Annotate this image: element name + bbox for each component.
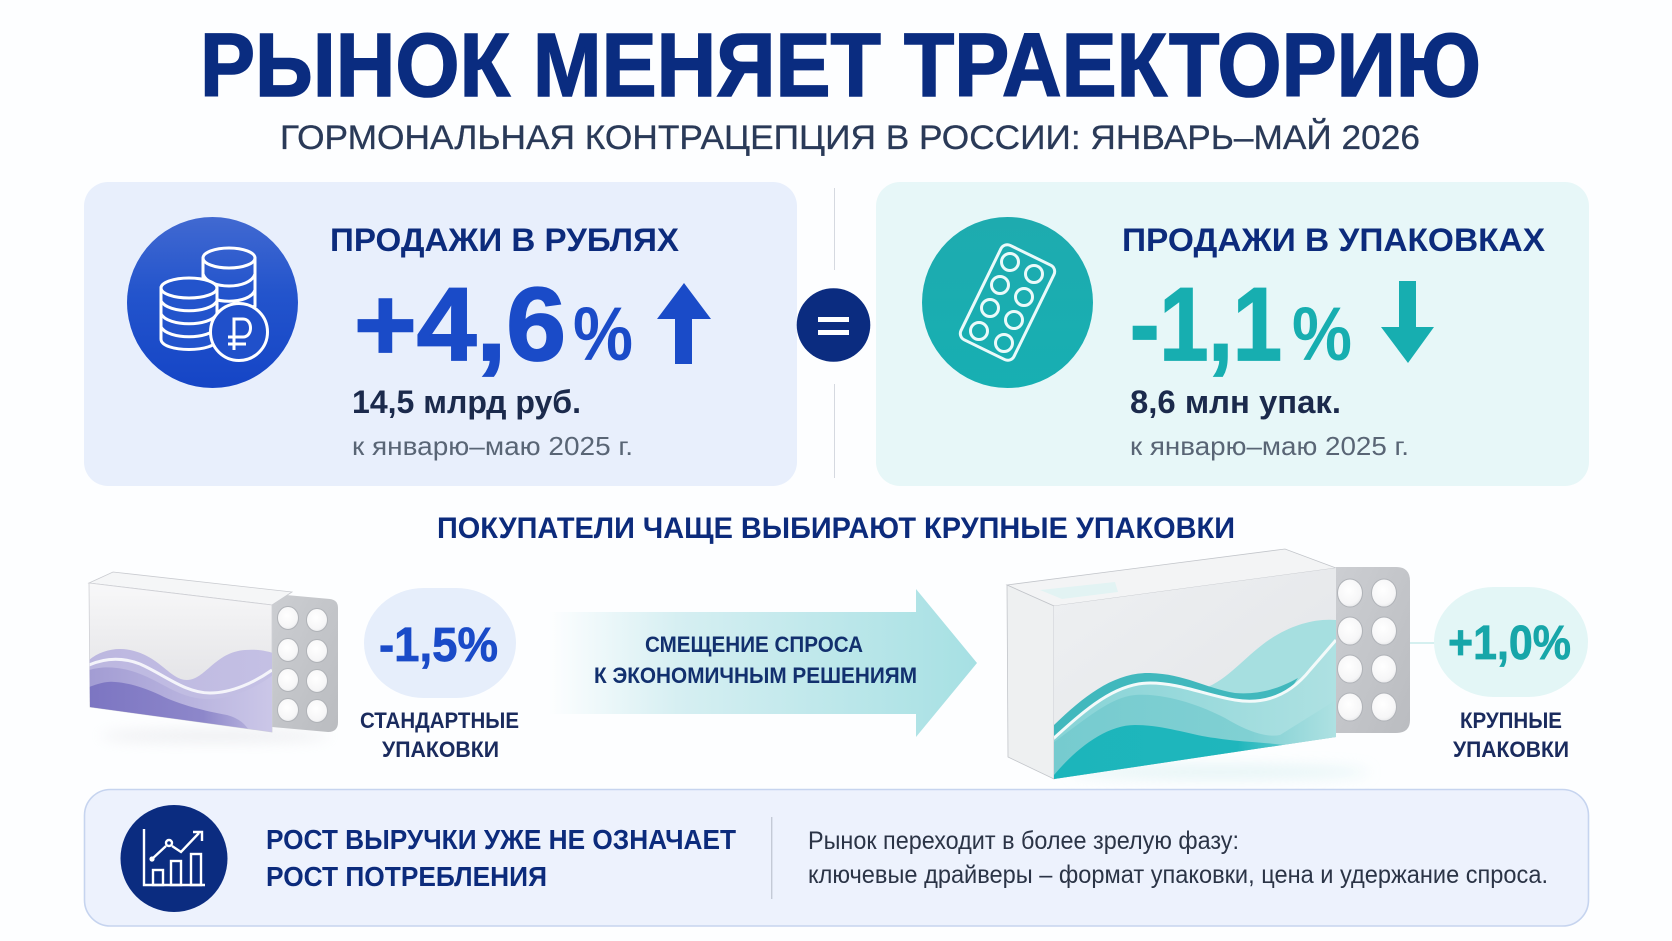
comparison note: к январю–маю 2025 г.: [352, 431, 633, 461]
key message: РОСТ ПОТРЕБЛЕНИЯ: [266, 861, 547, 892]
callout: standard packs change: [364, 588, 516, 698]
label: large packs: УПАКОВКИ: [1453, 737, 1569, 762]
amount: 8,6 млн упак.: [1130, 384, 1341, 420]
label: standard packs: УПАКОВКИ: [382, 737, 499, 762]
explanation: Рынок переходит в более зрелую фазу:: [808, 827, 1239, 855]
amount: 14,5 млрд руб.: [352, 384, 581, 420]
illustration: large pack: [1007, 549, 1410, 780]
panel: conclusion: [84, 790, 1588, 926]
arrow: down: [1381, 281, 1434, 363]
panel: sales in rubles: [84, 182, 797, 486]
subtitle: ГОРМОНАЛЬНАЯ КОНТРАЦЕПЦИЯ В РОССИИ: ЯНВАРЬ–МАЙ 2026: [280, 119, 1420, 157]
value: +4,6: [354, 267, 566, 383]
explanation: ключевые драйверы – формат упаковки, цена и удержание спроса.: [808, 861, 1548, 889]
callout: standard packs change: -1,5%: [379, 619, 498, 672]
callout: large packs change: +1,0%: [1448, 617, 1571, 670]
label: large packs: [1453, 708, 1569, 762]
label: standard packs: [360, 708, 519, 762]
arrow: demand shift: [549, 589, 977, 737]
callout: large packs change: [1434, 587, 1588, 697]
divider top: [834, 188, 835, 270]
connector: [1410, 642, 1440, 644]
comparison note: к январю–маю 2025 г.: [1130, 431, 1409, 461]
icon: blister: [922, 217, 1093, 388]
arrow: demand shift: К ЭКОНОМИЧНЫМ РЕШЕНИЯМ: [594, 663, 917, 688]
panel: sales in packs: [876, 182, 1589, 486]
arrow: up: [657, 283, 711, 364]
key message: РОСТ ВЫРУЧКИ УЖЕ НЕ ОЗНАЧАЕТ: [266, 824, 736, 855]
key message: [266, 824, 736, 892]
illustration: standard pack: [89, 572, 338, 742]
title: РЫНОК МЕНЯЕТ ТРАЕКТОРИЮ: [200, 16, 1481, 116]
label: standard packs: СТАНДАРТНЫЕ: [360, 708, 519, 733]
explanation: [808, 827, 1548, 889]
percent sign: %: [1292, 292, 1352, 377]
label: large packs: КРУПНЫЕ: [1460, 708, 1562, 733]
heading: ПРОДАЖИ В РУБЛЯХ: [330, 222, 680, 258]
divider bottom: [834, 384, 835, 478]
value: -1,1: [1130, 267, 1282, 383]
heading: ПРОДАЖИ В УПАКОВКАХ: [1122, 222, 1546, 258]
section heading: ПОКУПАТЕЛИ ЧАЩЕ ВЫБИРАЮТ КРУПНЫЕ УПАКОВКИ: [437, 512, 1235, 545]
icon: coins with ruble: [127, 217, 298, 388]
icon: growth chart: [120, 805, 228, 912]
percent sign: %: [573, 292, 633, 377]
arrow: demand shift: СМЕЩЕНИЕ СПРОСА: [645, 632, 863, 657]
icon: equals sign: [797, 288, 870, 362]
